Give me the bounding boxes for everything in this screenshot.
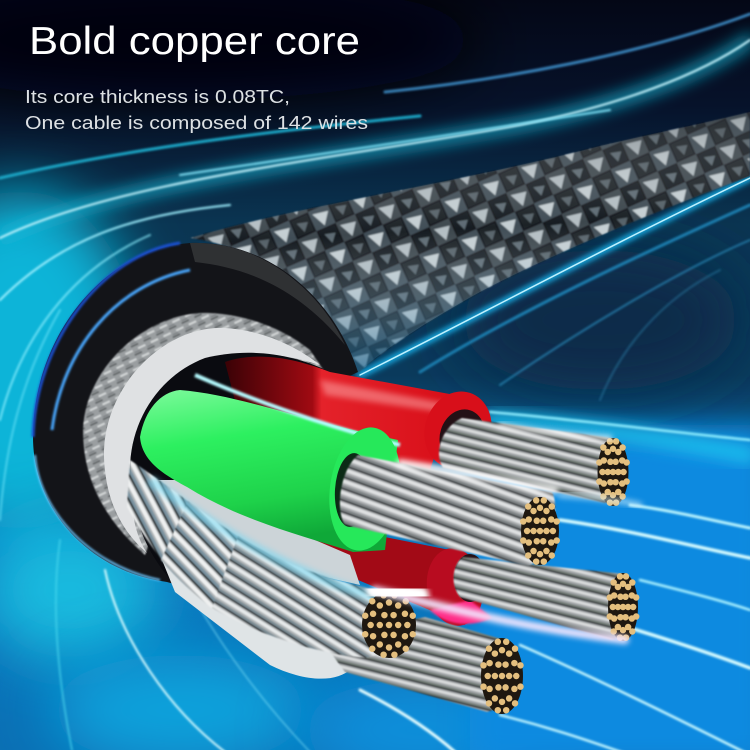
subtitle text block: One cable is composed of 142 wires bbox=[25, 112, 368, 133]
lens flare highlights bbox=[375, 425, 640, 640]
black outer rubber ring bbox=[33, 243, 358, 600]
red insulated wire upper bbox=[225, 357, 501, 480]
green insulated wire bbox=[140, 375, 408, 555]
copper core face upper right bbox=[598, 438, 628, 506]
title: Bold copper core bbox=[29, 20, 360, 63]
silver strands bottom with core bbox=[320, 617, 523, 714]
white inner foil ring bbox=[104, 328, 320, 553]
copper core face lower right bbox=[608, 573, 638, 641]
red insulated wire lower bbox=[300, 520, 492, 630]
light streaks lower left bbox=[56, 540, 310, 750]
center silver strands with core bbox=[340, 455, 559, 566]
subtitle text block: Its core thickness is 0.08TC, bbox=[25, 86, 290, 107]
light streaks upper area bbox=[0, 14, 750, 520]
braided metal shielding sleeve bbox=[83, 313, 330, 555]
light streaks right of cable bbox=[360, 178, 750, 400]
copper core face bottom bbox=[481, 638, 523, 714]
red wire end ring lower bbox=[422, 544, 492, 630]
dark cavity inside cable bbox=[130, 353, 360, 590]
white insulated wire bbox=[160, 555, 355, 679]
green wire end ring bbox=[322, 423, 408, 555]
silver strands upper right with core bbox=[439, 418, 628, 506]
braided nylon cable jacket bbox=[190, 112, 750, 372]
light band between green wire and silver wire bbox=[150, 480, 360, 585]
long silver strands wire with core bbox=[127, 460, 416, 658]
red wire end ring upper bbox=[415, 383, 501, 477]
copper core face center bottom bbox=[362, 592, 416, 658]
light streaks lower right bbox=[360, 412, 750, 750]
subtitle text block bbox=[25, 86, 368, 133]
silver strands lower right with core bbox=[454, 557, 638, 641]
copper core face center bbox=[521, 497, 559, 565]
